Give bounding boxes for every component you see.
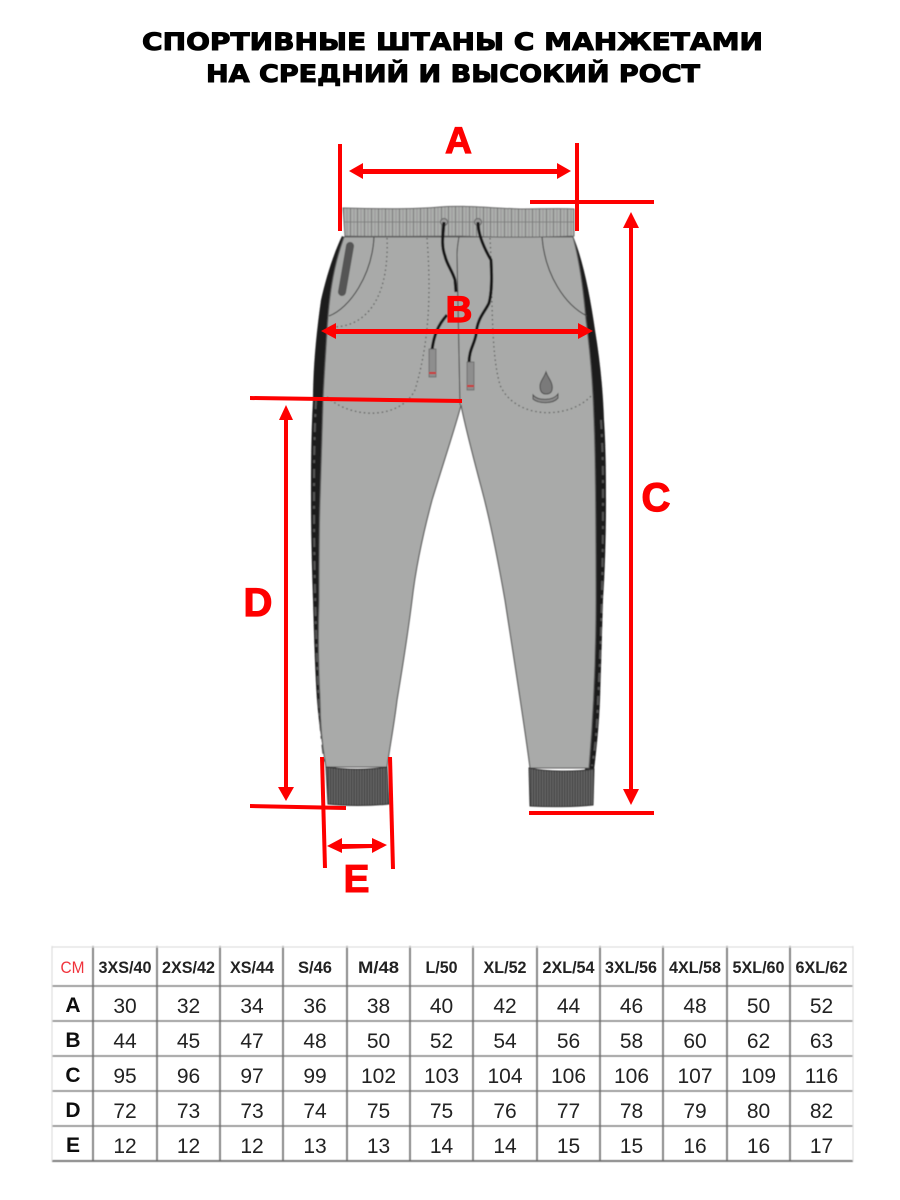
table header row: 3XS/40 [98, 958, 152, 977]
table values: 46 [620, 995, 643, 1018]
table values: 75 [430, 1100, 453, 1123]
table values: 13 [367, 1135, 390, 1158]
measurement D [244, 396, 462, 810]
table values: 77 [557, 1100, 580, 1123]
table header row: S/46 [298, 958, 332, 977]
letter E: E [343, 858, 370, 901]
arrow A [349, 163, 571, 179]
table values: 12 [113, 1135, 137, 1158]
table values: 95 [113, 1065, 137, 1088]
table row labels: B [65, 1029, 81, 1052]
table values: 45 [177, 1030, 200, 1053]
title: СПОРТИВНЫЕ ШТАНЫ С МАНЖЕТАМИ [142, 28, 763, 56]
waistband [343, 206, 574, 237]
table values: 107 [677, 1065, 713, 1088]
size table [52, 946, 853, 1161]
table values: 104 [487, 1065, 523, 1088]
table values: 52 [430, 1030, 453, 1053]
table values: 32 [177, 995, 200, 1018]
table values: 97 [240, 1065, 264, 1088]
table values: 74 [303, 1100, 327, 1123]
table values: 12 [240, 1135, 264, 1158]
table header row: XS/44 [230, 958, 275, 977]
table values: 34 [240, 995, 264, 1018]
table values: 44 [557, 995, 580, 1018]
table row labels: D [65, 1099, 81, 1122]
table values: 102 [361, 1065, 396, 1088]
letter A: A [445, 120, 472, 161]
table values: 78 [620, 1100, 643, 1123]
table values: 60 [683, 1030, 707, 1053]
table values: 75 [367, 1100, 390, 1123]
table values [113, 995, 838, 1158]
waistband stitching [344, 221, 574, 223]
measurement E [320, 757, 395, 901]
table values: 52 [810, 995, 833, 1018]
side stripe print texture [314, 400, 603, 766]
table values: 76 [493, 1100, 517, 1123]
table values: 50 [747, 995, 770, 1018]
table values: 30 [113, 995, 137, 1018]
table grid [52, 946, 853, 1161]
emblem [533, 372, 558, 403]
table header row: CM [60, 958, 84, 977]
measurement C [529, 212, 670, 815]
table header row: XL/52 [484, 958, 526, 977]
table header row [60, 958, 848, 977]
letter D: D [244, 581, 272, 625]
table header row: 5XL/60 [732, 958, 784, 977]
table values: 73 [240, 1100, 264, 1123]
title: НА СРЕДНИЙ И ВЫСОКИЙ РОСТ [206, 59, 701, 88]
title [142, 28, 763, 88]
table values: 99 [303, 1065, 327, 1088]
right cuff [529, 768, 594, 807]
left and right side stripes [311, 236, 606, 770]
table values: 13 [303, 1135, 327, 1158]
table values: 63 [810, 1030, 833, 1053]
table values: 42 [493, 995, 517, 1018]
table values: 103 [424, 1065, 459, 1088]
table row labels [65, 994, 81, 1157]
table values: 44 [113, 1030, 137, 1053]
letter C: C [642, 476, 670, 520]
table header row: 6XL/62 [796, 958, 848, 977]
table row labels: A [65, 994, 81, 1017]
table values: 16 [683, 1135, 707, 1158]
table values: 116 [805, 1065, 838, 1088]
table values: 96 [177, 1065, 200, 1088]
table values: 54 [493, 1030, 517, 1053]
table values: 12 [177, 1135, 200, 1158]
table values: 56 [557, 1030, 580, 1053]
table values: 106 [551, 1065, 586, 1088]
table values: 50 [367, 1030, 390, 1053]
measurement A [338, 120, 654, 231]
trouser body [318, 237, 596, 768]
table header row: 2XL/54 [542, 958, 595, 977]
pants illustration [311, 206, 606, 807]
table values: 47 [240, 1030, 264, 1053]
zipper pocket [342, 246, 350, 292]
table values: 62 [747, 1030, 770, 1053]
table header row: L/50 [426, 958, 458, 977]
centre seam [457, 208, 464, 405]
table values: 36 [303, 995, 327, 1018]
eyelets [440, 218, 482, 226]
table values: 16 [747, 1135, 770, 1158]
table values: 38 [367, 995, 390, 1018]
table values: 40 [430, 995, 453, 1018]
table values: 48 [303, 1030, 327, 1053]
table row labels: C [65, 1064, 81, 1087]
table header row: 4XL/58 [669, 958, 721, 977]
table values: 79 [683, 1100, 707, 1123]
table header row: 2XS/42 [162, 958, 215, 977]
table values: 48 [683, 995, 707, 1018]
table values: 58 [620, 1030, 643, 1053]
table row labels: E [66, 1134, 80, 1157]
table header row: M/48 [358, 958, 399, 977]
stitched pocket bags [325, 238, 592, 413]
measurement B [321, 289, 593, 339]
table values: 72 [113, 1100, 137, 1123]
table header row: 3XL/56 [605, 958, 657, 977]
table values: 82 [810, 1100, 833, 1123]
table values: 14 [430, 1135, 453, 1158]
table values: 15 [557, 1135, 580, 1158]
front pockets [329, 237, 587, 316]
table values: 15 [620, 1135, 643, 1158]
drawstring tips [429, 349, 474, 390]
table values: 17 [810, 1135, 833, 1158]
table values: 109 [741, 1065, 776, 1088]
left cuff [326, 767, 389, 806]
drawstrings [432, 222, 492, 363]
table values: 106 [614, 1065, 649, 1088]
table values: 14 [493, 1135, 517, 1158]
letter B: B [446, 289, 472, 330]
table values: 73 [177, 1100, 200, 1123]
table values: 80 [747, 1100, 770, 1123]
